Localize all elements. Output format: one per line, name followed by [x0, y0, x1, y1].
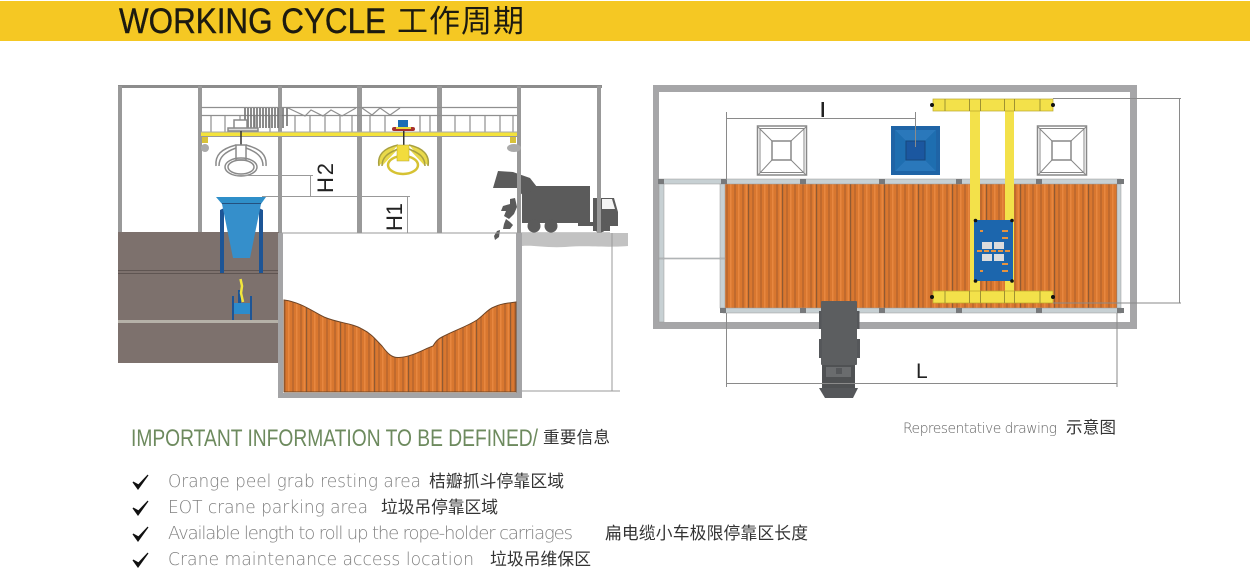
- dimension H2: H2: [313, 163, 338, 193]
- section heading: IMPORTANT INFORMATION TO BE DEFINED/: [131, 425, 538, 452]
- truck plan: [819, 301, 860, 398]
- item 2: EOT crane parking area: [168, 497, 368, 518]
- item 2: 垃圾吊停靠区域: [381, 498, 498, 517]
- waste bunker: [725, 184, 1117, 308]
- caption: representative drawing: 示意图: [1066, 418, 1116, 437]
- EOT crane plan: [930, 99, 1055, 303]
- grab: white: [216, 120, 266, 176]
- garbage truck: [493, 171, 618, 240]
- section heading: 重要信息: [543, 428, 610, 447]
- item 1: Orange peel grab resting area: [168, 471, 421, 492]
- caption: representative drawing: [903, 418, 1116, 437]
- building frame: [118, 85, 610, 234]
- underground machine: [232, 279, 252, 320]
- hopper plan: blue: [891, 126, 940, 175]
- diagram: side elevation: [118, 85, 628, 398]
- crane truss: [201, 108, 517, 132]
- item 2: [133, 497, 498, 518]
- dimension H2: [236, 163, 410, 233]
- caption: representative drawing: Representative drawing: [903, 421, 1057, 437]
- waste pit: [278, 233, 522, 398]
- item 4: Crane maintenance access location: [168, 549, 474, 570]
- cable festoon: [245, 108, 287, 128]
- hopper plan: left: [758, 126, 806, 175]
- dimension L: [726, 313, 1117, 387]
- checklist: [133, 471, 808, 570]
- diagram: plan view: [653, 85, 1181, 398]
- parked hooks: [201, 137, 521, 152]
- dimension I: [726, 102, 916, 180]
- dimension L: L: [916, 360, 928, 383]
- item 3: Available length to roll up the rope-holder carriages: [168, 523, 573, 544]
- item 4: 垃圾吊维保区: [490, 550, 591, 569]
- hopper plan: right: [1038, 126, 1086, 175]
- building outline: [653, 85, 1137, 329]
- crane rails: [659, 179, 1121, 322]
- dimension crane span: [1053, 98, 1181, 303]
- ground slab: [522, 233, 628, 391]
- grab: yellow with trolley: [379, 120, 428, 174]
- header banner: [0, 1, 1250, 41]
- crane girder: [201, 132, 517, 137]
- rail posts: [658, 179, 1124, 313]
- title: Chinese: 工作周期: [397, 4, 524, 39]
- item 3: 扁电缆小车极限停靠区长度: [605, 524, 808, 543]
- basement block: [118, 232, 279, 363]
- item 1: 桔瓣抓斗停靠区域: [429, 472, 564, 491]
- dimension H1: H1: [382, 203, 407, 231]
- crane trolley plan: [974, 219, 1014, 283]
- title: WORKING CYCLE: [119, 2, 386, 41]
- hopper: [216, 197, 266, 273]
- item 1: [133, 471, 564, 492]
- item 3: [133, 523, 808, 544]
